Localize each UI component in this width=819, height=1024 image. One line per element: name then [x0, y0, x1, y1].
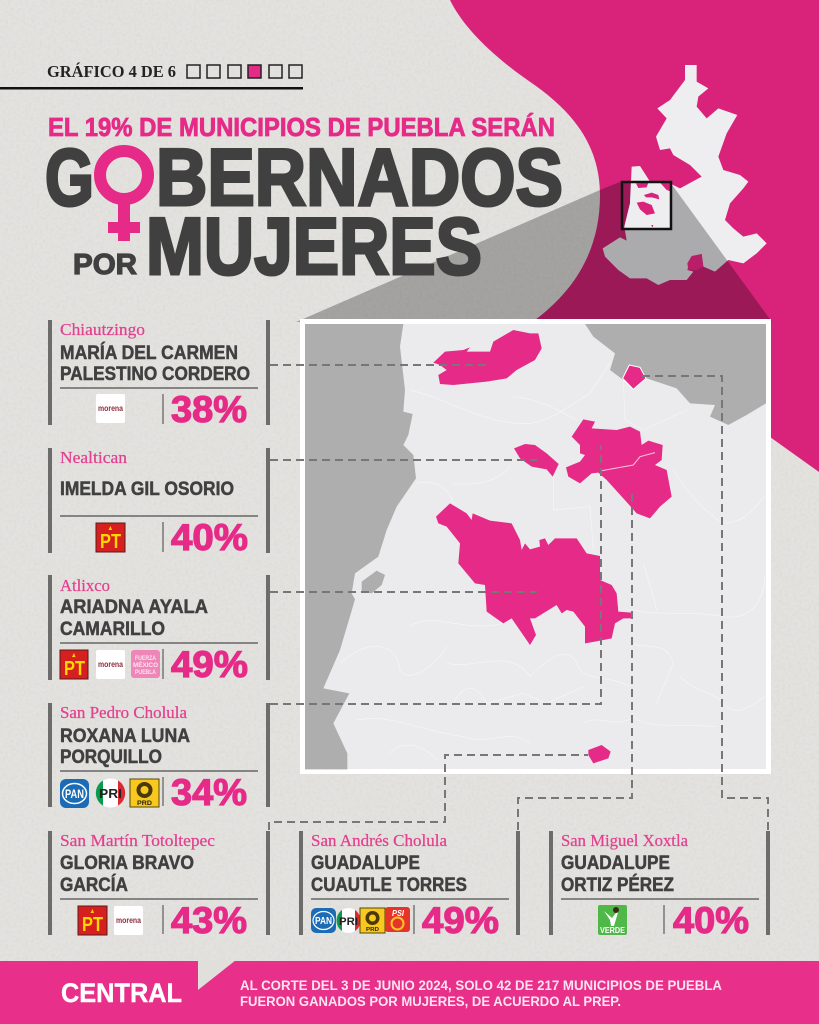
title word MUJERES: MUJERES — [146, 202, 482, 292]
candidate name: CAMARILLO — [60, 619, 165, 640]
candidate name — [311, 853, 467, 896]
neighbouring territory left — [305, 324, 416, 769]
footer note: AL CORTE DEL 3 DE JUNIO 2024, SOLO 42 DE 217 MUNICIPIOS DE PUEBLA — [240, 977, 722, 993]
percentage: 38% — [171, 389, 247, 430]
candidate name: ORTIZ PÉREZ — [561, 874, 674, 896]
progress squares — [187, 65, 302, 78]
panel: Nealtican — [48, 448, 270, 558]
state map of Puebla — [603, 65, 767, 285]
logo: Verde — [598, 905, 627, 935]
logo: PRD — [130, 779, 159, 807]
logo: PT — [78, 906, 107, 936]
candidate name: ROXANA LUNA — [60, 726, 190, 747]
logo: PRI: PRI — [339, 916, 358, 928]
logo: PRD: PRD — [366, 927, 379, 933]
neighbouring territory lake — [362, 571, 385, 593]
logo: PAN — [311, 908, 336, 933]
candidate name: GUADALUPE — [311, 853, 420, 874]
logo: PSI — [385, 907, 410, 932]
percentage: 34% — [171, 772, 247, 813]
candidate name — [60, 853, 194, 896]
candidate name — [60, 597, 208, 640]
header tag — [0, 62, 303, 90]
logo: PRI — [96, 778, 125, 808]
icon: venus symbol — [100, 151, 148, 241]
percentage: 43% — [171, 900, 247, 941]
logo: Fuerza por México: MÉXICO — [133, 661, 158, 669]
panel: Chiautzingo — [48, 320, 270, 430]
logo: morena — [114, 906, 143, 935]
town: Atlixco — [60, 576, 110, 595]
logo: PAN: PAN — [65, 787, 84, 801]
title word POR: POR — [73, 249, 137, 281]
municipality: Chiautzingo — [433, 330, 542, 385]
logo: PAN — [60, 779, 89, 808]
municipality: San Miguel Xoxtla — [623, 365, 646, 389]
candidate name: GLORIA BRAVO — [60, 853, 194, 874]
panel: San Pedro Cholula — [48, 703, 270, 813]
logo: morena — [96, 394, 125, 423]
connector lines — [269, 365, 768, 830]
logo: Fuerza por México — [131, 650, 160, 678]
graphic counter text: GRÁFICO 4 DE 6 — [47, 62, 176, 81]
logo: Fuerza por México: FUERZA — [135, 656, 157, 662]
candidate name — [561, 853, 674, 896]
logo: CENTRAL: CENTRAL — [61, 978, 182, 1008]
candidate name: CUAUTLE TORRES — [311, 875, 467, 896]
magenta background shape — [450, 0, 819, 472]
panel: San Miguel Xoxtla — [549, 831, 770, 941]
candidate name: MARÍA DEL CARMEN — [60, 342, 238, 364]
candidate name — [60, 342, 250, 385]
town: Chiautzingo — [60, 320, 145, 339]
candidate name: PORQUILLO — [60, 747, 162, 768]
shadow beam from locator box to map — [296, 181, 772, 322]
town: San Pedro Cholula — [60, 703, 187, 722]
candidate name: IMELDA GIL OSORIO — [60, 479, 234, 500]
town: San Miguel Xoxtla — [561, 831, 688, 850]
footer note: FUERON GANADOS POR MUJERES, DE ACUERDO AL PREP. — [240, 993, 621, 1009]
pink municipality on state map — [687, 254, 703, 270]
percentage: 40% — [171, 517, 248, 558]
municipality: San Martín Totoltepec — [588, 745, 611, 763]
title word BERNADOS: BERNADOS — [156, 133, 563, 223]
municipality: Atlixco — [436, 503, 632, 645]
logo: morena — [96, 650, 125, 679]
logo: PRI — [336, 908, 360, 933]
logo: PT: PT — [100, 531, 121, 553]
municipal boundaries — [340, 363, 765, 760]
title — [45, 112, 563, 292]
logo: morena: morena — [98, 660, 123, 669]
logo: morena: morena — [98, 404, 123, 413]
logo: PSI: PSI — [392, 909, 405, 918]
logo: PT — [96, 523, 125, 553]
logo: Fuerza por México: PUEBLA — [135, 670, 157, 676]
logo: PRI: PRI — [99, 786, 122, 801]
logo: PRD: PRD — [137, 801, 153, 807]
candidate name: ARIADNA AYALA — [60, 597, 208, 618]
title word G: G — [45, 133, 94, 223]
panel: Atlixco — [48, 575, 270, 685]
logo: Verde: VERDE — [600, 926, 626, 935]
candidate name: GUADALUPE — [561, 853, 670, 874]
percentage: 49% — [422, 900, 499, 941]
locator box with municipalities — [620, 180, 672, 230]
logo: PT: PT — [82, 914, 103, 936]
logo: PRD — [360, 908, 385, 933]
panel: San Martín Totoltepec — [48, 831, 270, 941]
logo: PT — [60, 650, 88, 680]
footer band — [0, 960, 819, 1024]
town: Nealtican — [60, 448, 128, 467]
municipalities: San Pedro Cholula and San Andrés Cholula — [566, 419, 672, 518]
town: San Andrés Cholula — [311, 831, 447, 850]
logo: morena: morena — [116, 916, 141, 925]
town: San Martín Totoltepec — [60, 831, 215, 850]
footer note — [240, 977, 722, 1009]
panel: zoomed map — [300, 319, 771, 774]
panel: San Andrés Cholula — [299, 831, 520, 941]
candidate name: PALESTINO CORDERO — [60, 364, 250, 385]
logo: PAN: PAN — [315, 916, 332, 927]
candidate name — [60, 726, 190, 768]
municipality: Nealtican — [514, 444, 559, 477]
neighbouring territory top right — [585, 324, 766, 425]
percentage: 40% — [673, 900, 749, 941]
candidate name: GARCÍA — [60, 874, 128, 896]
title lead line: EL 19% DE MUNICIPIOS DE PUEBLA SERÁN — [48, 112, 555, 142]
logo: PT: PT — [64, 658, 85, 680]
percentage: 49% — [171, 644, 248, 685]
